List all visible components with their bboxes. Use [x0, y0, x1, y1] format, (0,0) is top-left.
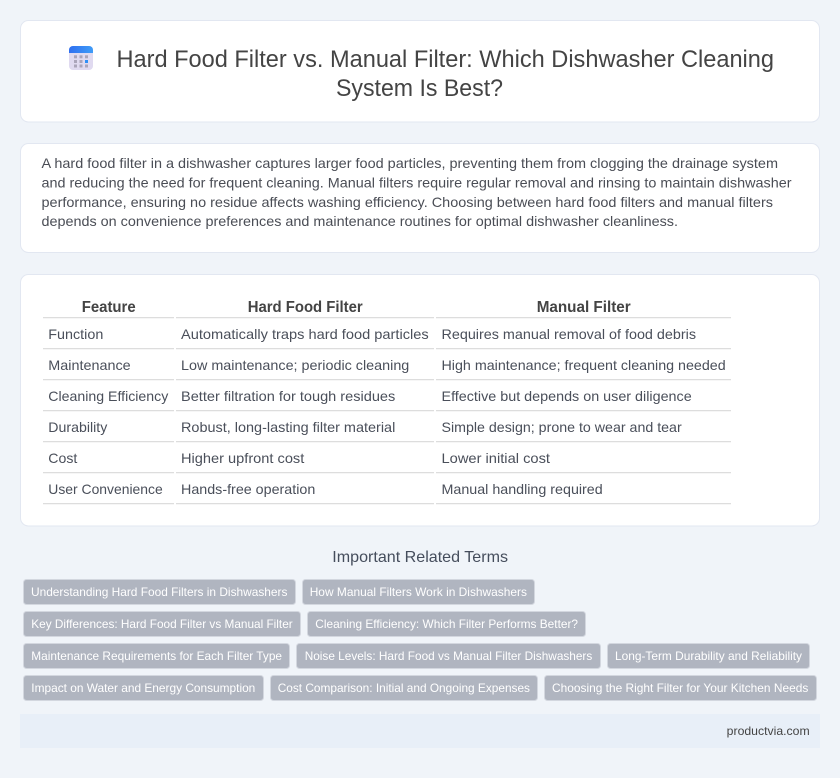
chip	[24, 580, 296, 604]
row: cost: Higher upfront cost	[181, 450, 304, 466]
chip	[24, 676, 264, 700]
row: cost: Cost	[48, 450, 77, 466]
panel: comparison table	[20, 274, 820, 526]
chip: How Manual Filters Work in Dishwashers	[310, 585, 527, 599]
panel: header	[20, 20, 820, 122]
row: maintenance: Low maintenance; periodic cleaning	[181, 357, 409, 373]
row: function: Function	[48, 326, 103, 342]
row: user convenience: User Convenience	[48, 481, 163, 497]
chip	[608, 644, 810, 668]
row: cost: Lower initial cost	[442, 450, 550, 466]
row: user convenience: Manual handling required	[442, 481, 603, 497]
chip	[270, 676, 538, 700]
table header row	[82, 299, 631, 316]
chip: Maintenance Requirements for Each Filter Type	[31, 649, 282, 663]
chip: Understanding Hard Food Filters in Dishwashers	[31, 585, 287, 599]
chip: Long-Term Durability and Reliability	[615, 649, 802, 663]
row: cleaning efficiency: Cleaning Efficiency	[48, 388, 168, 404]
title: Hard Food Filter vs. Manual Filter: Which Dishwasher Cleaning	[116, 46, 774, 73]
row: durability: Robust, long-lasting filter material	[181, 419, 395, 435]
icon: calendar	[69, 46, 93, 70]
footer	[20, 714, 820, 748]
row: function: Requires manual removal of food debris	[442, 326, 696, 342]
row: cleaning efficiency: Better filtration for tough residues	[181, 388, 395, 404]
chip	[544, 676, 816, 700]
description text: and reducing the need for frequent cleaning. Manual filters require regular removal and rinsing to maintain dishwasher	[42, 174, 792, 190]
chip: Key Differences: Hard Food Filter vs Manual Filter	[31, 617, 293, 631]
chip	[24, 612, 300, 636]
row: user convenience: Hands-free operation	[181, 481, 315, 497]
table header row: Manual Filter	[537, 299, 631, 316]
title: System Is Best?	[336, 75, 503, 102]
chip: Cleaning Efficiency: Which Filter Performs Better?	[315, 617, 578, 631]
row: cleaning efficiency	[48, 388, 692, 404]
row: durability	[48, 419, 682, 435]
description text: depends on convenience preferences and maintenance routines for optimal dishwasher cleanliness.	[42, 213, 678, 229]
description text: A hard food filter in a dishwasher captures larger food particles, preventing them from clogging the drainage system	[42, 155, 778, 171]
chip: Choosing the Right Filter for Your Kitchen Needs	[552, 681, 808, 695]
heading: important related terms: Important Related Terms	[332, 549, 508, 566]
row: function: Automatically traps hard food particles	[181, 326, 429, 342]
title	[116, 46, 774, 102]
table header row: Hard Food Filter	[248, 299, 363, 316]
row: maintenance: High maintenance; frequent cleaning needed	[442, 357, 726, 373]
row: user convenience	[48, 481, 603, 497]
row: cleaning efficiency: Effective but depends on user diligence	[442, 388, 692, 404]
row: function	[48, 326, 696, 342]
description text	[42, 155, 792, 229]
description text: performance, ensuring no residue affects washing efficiency. Choosing between hard food filters and manual filters	[42, 194, 773, 210]
related terms chips	[24, 580, 816, 700]
row: durability: Simple design; prone to wear and tear	[442, 419, 682, 435]
chip	[296, 644, 600, 668]
row: maintenance: Maintenance	[48, 357, 131, 373]
chip: Cost Comparison: Initial and Ongoing Expenses	[278, 681, 530, 695]
row: maintenance	[48, 357, 726, 373]
row: cost	[48, 450, 550, 466]
footer source text: productvia.com	[727, 724, 810, 738]
row: durability: Durability	[48, 419, 107, 435]
chip	[302, 580, 534, 604]
chip	[24, 644, 290, 668]
chip	[308, 612, 586, 636]
chip: Noise Levels: Hard Food vs Manual Filter Dishwashers	[305, 649, 592, 663]
panel: description	[20, 144, 820, 252]
table header row: Feature	[82, 299, 136, 316]
chip: Impact on Water and Energy Consumption	[31, 681, 255, 695]
